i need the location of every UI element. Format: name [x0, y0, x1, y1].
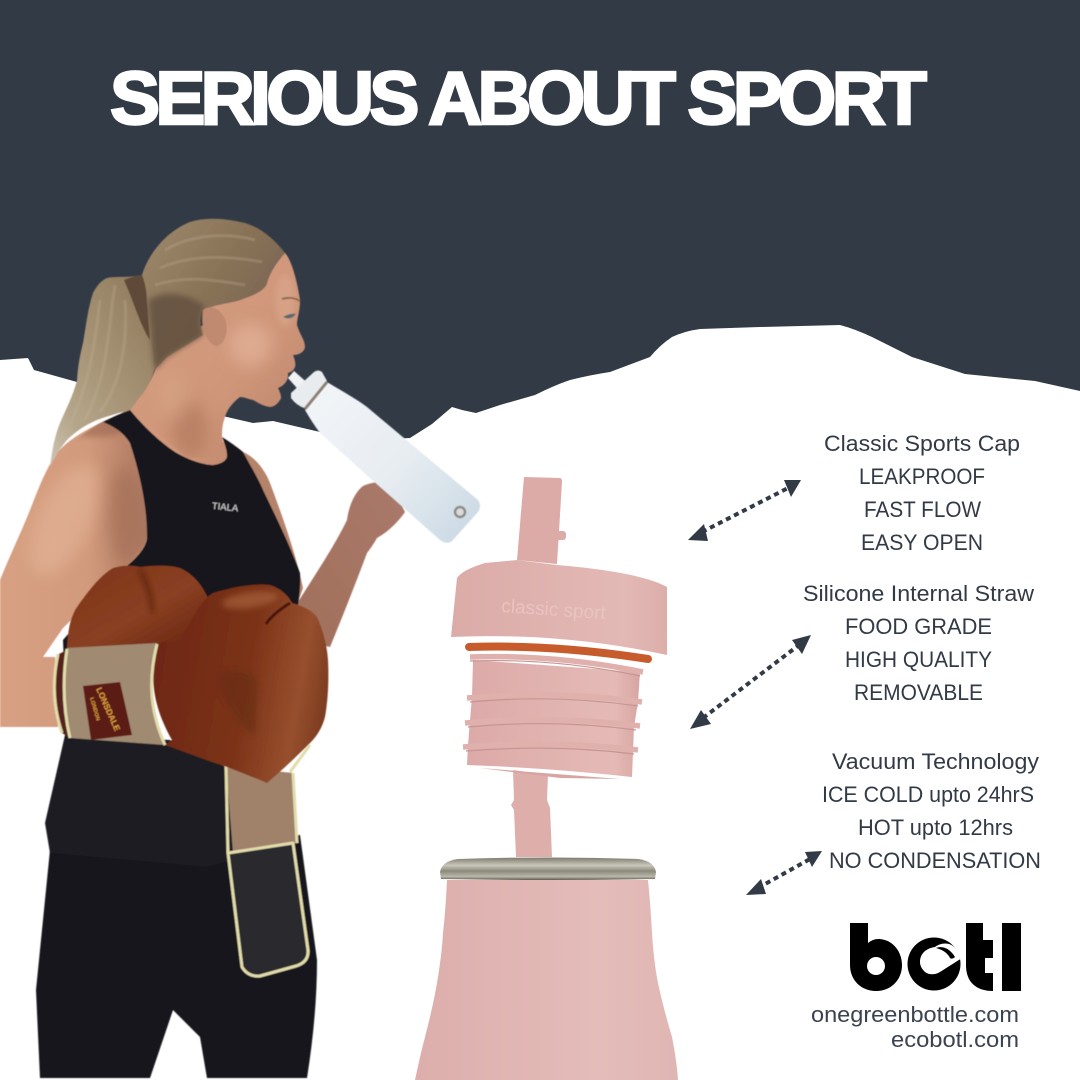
- upper arm skin: [0, 412, 147, 727]
- sports cap product: [415, 477, 678, 1080]
- front glove slit: [266, 603, 290, 624]
- feature text: silicone internal straw: HIGH QUALITY: [845, 647, 992, 672]
- dark wrist band: [55, 650, 70, 738]
- feature text: silicone internal straw: [803, 581, 1034, 705]
- arrow: vacuum technology: [746, 851, 822, 895]
- feature text: classic sports cap: LEAKPROOF: [859, 464, 985, 489]
- feature text: silicone internal straw: REMOVABLE: [854, 680, 983, 705]
- neck and face: [125, 253, 305, 470]
- arrow: sports cap: [688, 480, 801, 541]
- front boxing glove: [153, 584, 328, 783]
- feature text: vacuum technology: ICE COLD upto 24hrS: [822, 782, 1034, 807]
- dark underside of hair: [148, 294, 205, 370]
- back boxing glove: [67, 566, 208, 648]
- lower tank top: [45, 735, 232, 867]
- tank top logo: TIALA: [211, 501, 239, 515]
- sliver of far shoulder: [238, 448, 303, 605]
- website addresses: onegreenbottle.com: [811, 1002, 1019, 1027]
- feature text: silicone internal straw: Silicone Internal Straw: [803, 581, 1034, 606]
- hair on head: [142, 219, 285, 370]
- letter b: [850, 923, 902, 991]
- hair knot: [124, 275, 150, 340]
- orange o-ring: [469, 646, 648, 659]
- metal bottle rim: [440, 858, 656, 880]
- bottle body: [305, 382, 480, 543]
- lower straw: [511, 770, 552, 857]
- letter o: [908, 938, 960, 990]
- eye: [283, 314, 296, 318]
- black tank top: [63, 410, 300, 690]
- plug ridge shadow: [466, 661, 640, 754]
- forearm and hand: [298, 482, 405, 647]
- white sports bottle: [288, 370, 480, 543]
- letter o counter and swoosh: [920, 944, 962, 974]
- threaded plug: [467, 660, 640, 777]
- bottom plate: [480, 768, 620, 779]
- pink bottle body: [415, 880, 678, 1080]
- embossed cap text: classic sport: [501, 596, 607, 624]
- feature text: vacuum technology: Vacuum Technology: [832, 749, 1039, 774]
- ponytail: [50, 275, 155, 467]
- cuff piping: [54, 644, 165, 745]
- glove wrist cuff: [63, 643, 165, 745]
- hair highlights: [155, 236, 262, 285]
- botl logo: [850, 923, 1021, 991]
- title: SERIOUS ABOUT SPORT: [110, 56, 926, 140]
- face shading: [170, 278, 293, 457]
- dark header background: [0, 0, 1080, 445]
- skin base behind tank top: [100, 408, 232, 545]
- letter l: [1002, 923, 1021, 991]
- letter t: [966, 923, 993, 991]
- bottle collar band: [305, 382, 327, 409]
- torn white paper area: [0, 325, 1080, 1080]
- eyebrow: [282, 298, 300, 301]
- bottle cap: [291, 370, 327, 408]
- website addresses: [811, 1002, 1019, 1052]
- glove highlights: [221, 588, 279, 612]
- cap body: [451, 560, 667, 655]
- ponytail strands: [70, 285, 126, 425]
- feature text: silicone internal straw: FOOD GRADE: [845, 614, 992, 639]
- label text: brand: LONSDALE: [94, 686, 122, 733]
- feature text: vacuum technology: NO CONDENSATION: [829, 848, 1041, 873]
- straw nub: [555, 531, 566, 540]
- feature text: vacuum technology: [822, 749, 1041, 873]
- feature text: classic sports cap: Classic Sports Cap: [824, 431, 1020, 456]
- feature text: classic sports cap: FAST FLOW: [864, 497, 981, 522]
- shoulder shading: [32, 422, 138, 572]
- bottle base dot: [455, 507, 465, 517]
- woman boxer drinking: [0, 219, 480, 1078]
- glove label: [83, 682, 132, 740]
- upper straw: [517, 477, 562, 564]
- arrow: internal straw: [690, 635, 811, 729]
- feature text: vacuum technology: HOT upto 12hrs: [858, 815, 1013, 840]
- strap suede: [226, 766, 298, 853]
- hanging glove strap: [226, 745, 310, 976]
- ear: [202, 307, 227, 346]
- feature text: classic sports cap: EASY OPEN: [861, 530, 983, 555]
- bottle spout: [288, 371, 311, 395]
- strap velcro: [228, 843, 308, 976]
- plug ridges: [463, 657, 643, 750]
- feature text: classic sports cap: [824, 431, 1020, 555]
- label text: city: LONDON: [88, 697, 100, 721]
- back glove slit: [140, 570, 152, 612]
- website addresses: ecobotl.com: [891, 1027, 1019, 1052]
- strap piping: [226, 745, 310, 853]
- leggings: [36, 835, 317, 1078]
- glove emblem: [216, 671, 257, 735]
- swoosh drop: [936, 947, 955, 959]
